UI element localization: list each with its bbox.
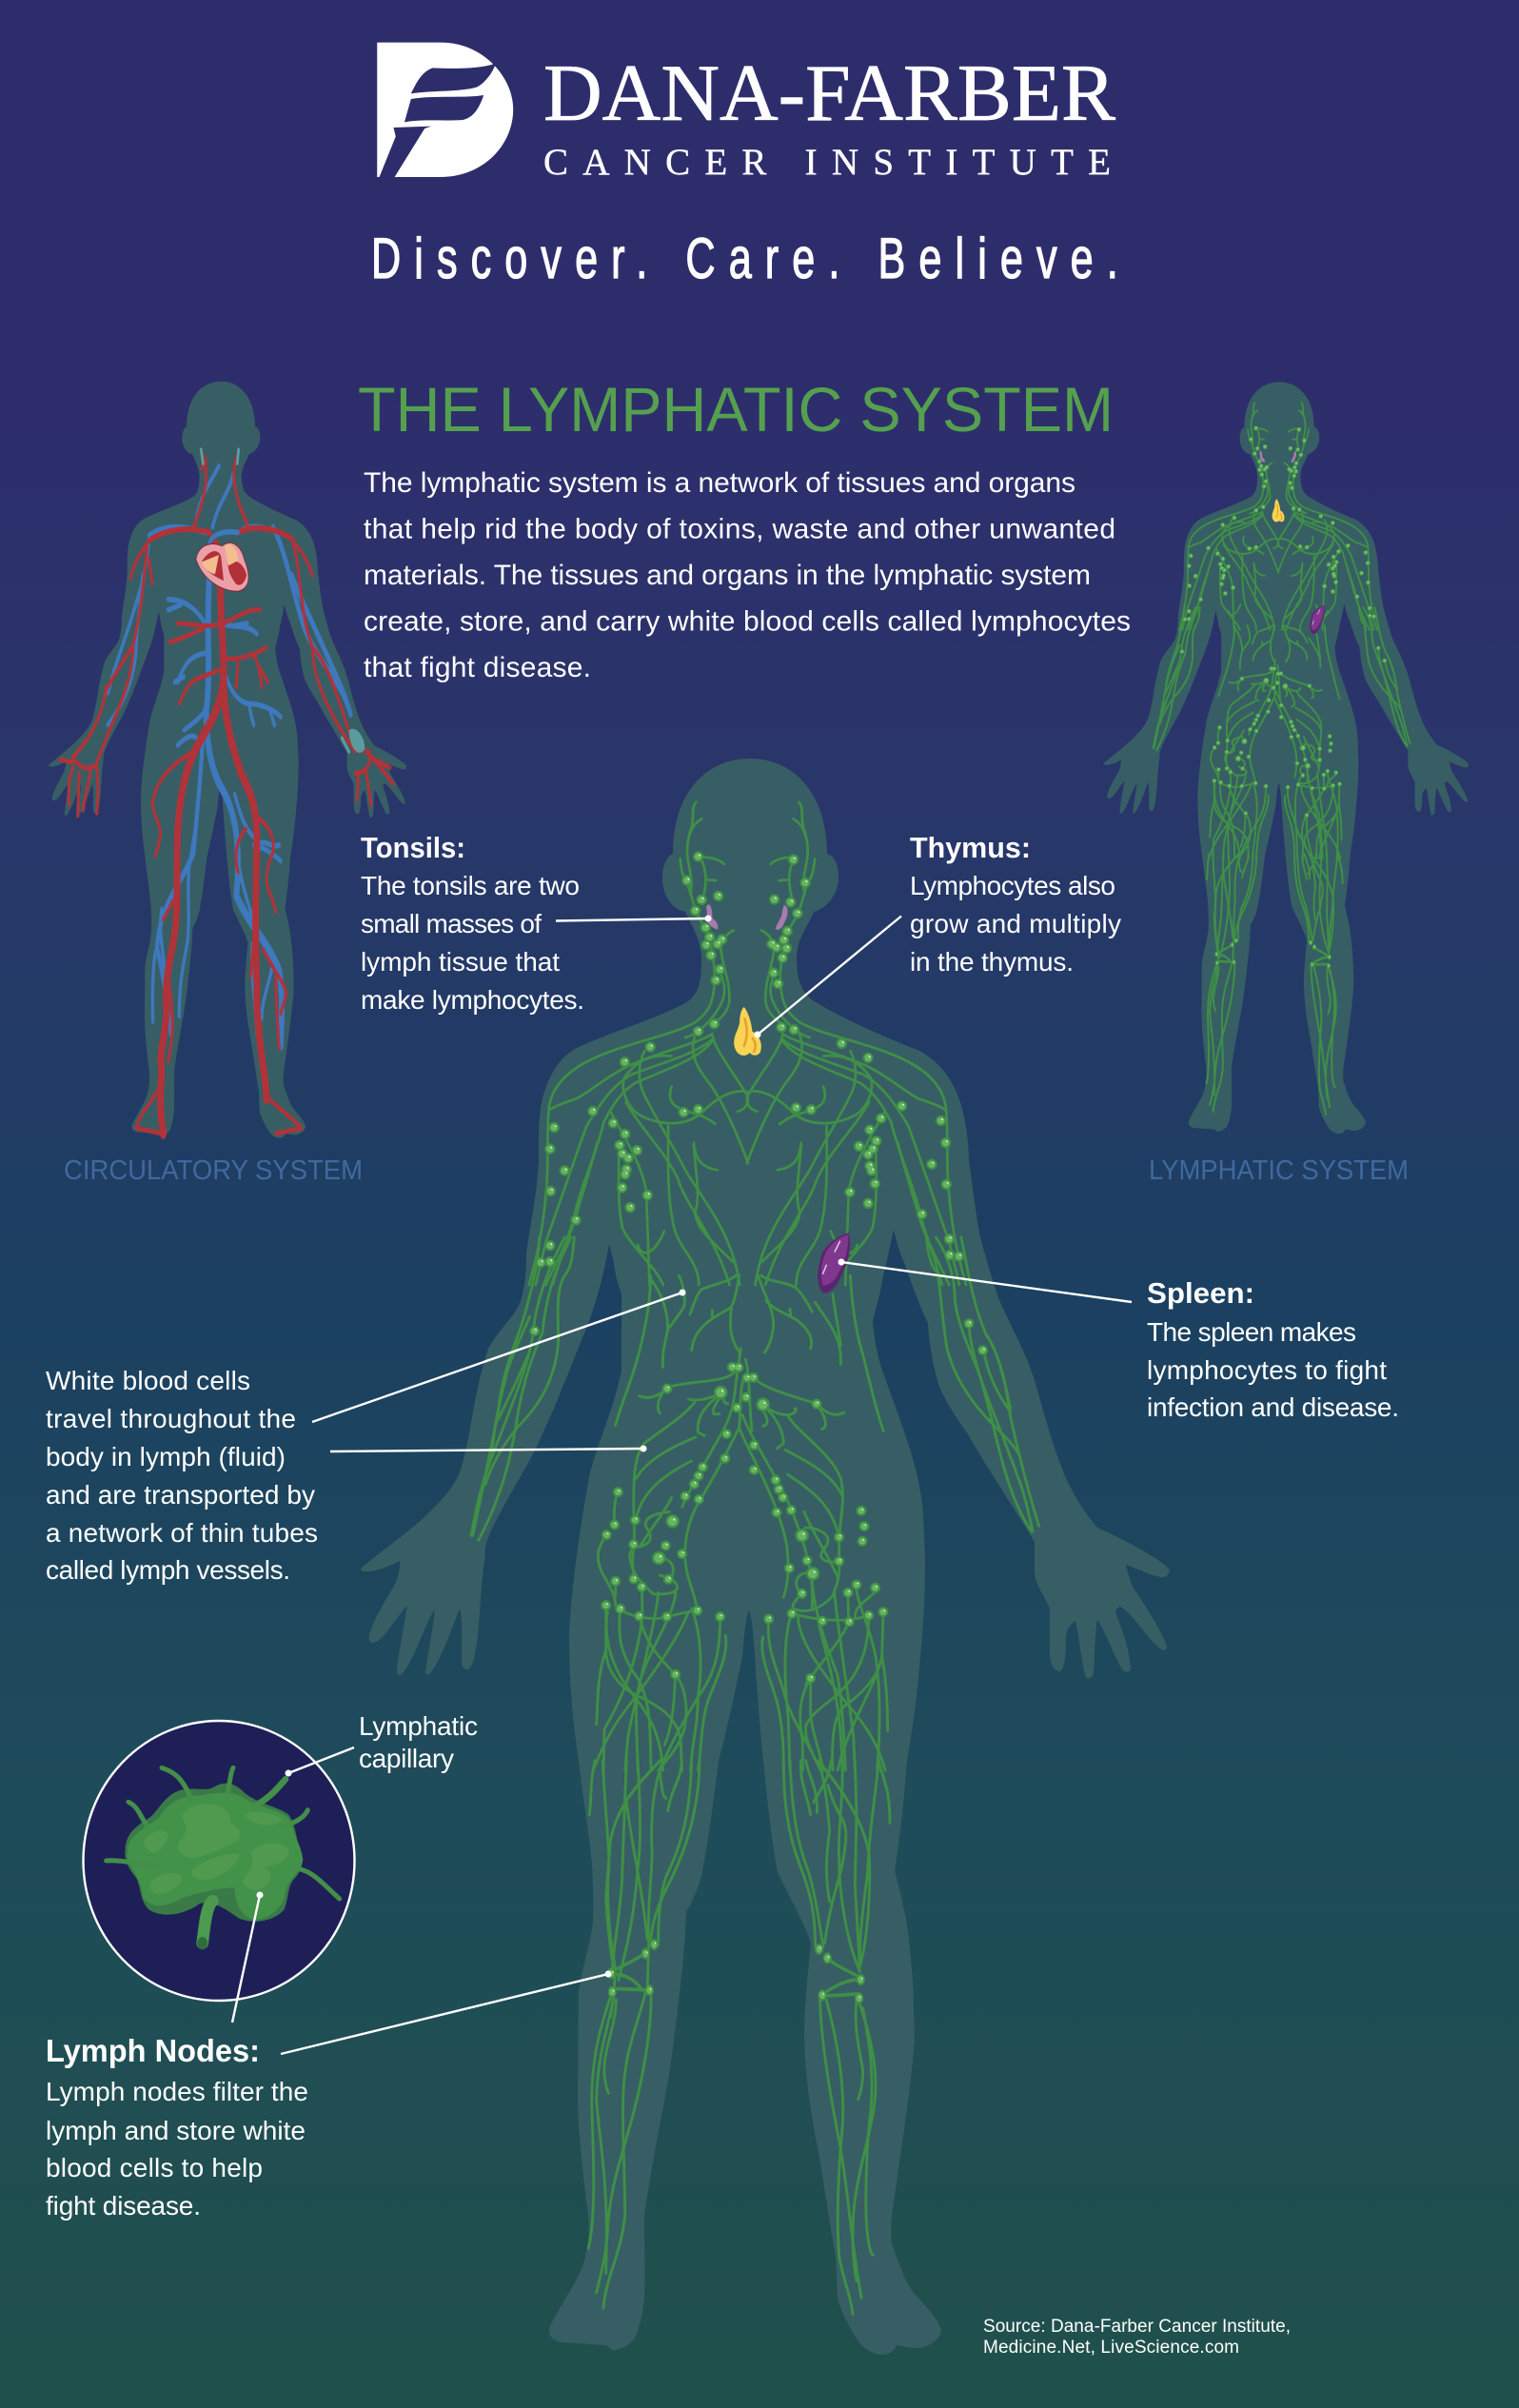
callout: white blood cells: body in lymph (fluid): [46, 1442, 286, 1471]
intro paragraph: materials. The tissues and organs in the lymphatic system: [364, 560, 1091, 591]
lymphatic capillaries: [107, 1767, 340, 1949]
callout: white blood cells: a network of thin tubes: [46, 1518, 318, 1548]
callout: spleen: Spleen:: [1147, 1276, 1254, 1310]
callout: tonsils: [361, 831, 712, 1015]
intro paragraph: create, store, and carry white blood cells called lymphocytes: [364, 605, 1131, 638]
source note: Source: Dana-Farber Cancer Institute,: [983, 2317, 1291, 2337]
logo: Dana-Farber shield: [377, 43, 513, 177]
source note: [983, 2317, 1291, 2358]
callout: lymph nodes: blood cells to help: [46, 2153, 263, 2182]
callout: thymus: grow and multiply: [910, 909, 1121, 938]
circulatory vessels and heart: [60, 450, 393, 1134]
organ: thymus: [734, 1007, 761, 1056]
callout: tonsils: small masses of: [361, 909, 542, 938]
callout: thymus: Thymus:: [910, 831, 1031, 864]
callout: white blood cells: and are transported by: [46, 1480, 315, 1510]
organs: [706, 904, 850, 1293]
callout: white blood cells: travel throughout the: [46, 1404, 296, 1433]
callout: tonsils: The tonsils are two: [361, 871, 580, 900]
callout: lymphatic capillary: [286, 1711, 478, 1776]
lymph vessels and nodes: [471, 802, 1039, 2314]
callout: lymph nodes: [46, 1892, 611, 2220]
callout: white blood cells: White blood cells: [46, 1366, 250, 1395]
callout: lymphatic capillary: capillary: [359, 1744, 454, 1773]
callout: tonsils: lymph tissue that: [361, 947, 560, 977]
callout: white blood cells: [46, 1289, 685, 1585]
icon: heart: [196, 543, 248, 591]
callout: thymus: in the thymus.: [910, 947, 1074, 977]
lymph node blob: [125, 1784, 303, 1922]
source note: Medicine.Net, LiveScience.com: [983, 2338, 1239, 2358]
callout: white blood cells: called lymph vessels.: [46, 1555, 290, 1585]
callout: tonsils: make lymphocytes.: [361, 985, 584, 1015]
label: lymphatic system: LYMPHATIC SYSTEM: [1149, 1155, 1409, 1186]
callout: lymph nodes: Lymph nodes filter the: [46, 2077, 308, 2106]
logo wordmark: Cancer Institute: CANCER INSTITUTE: [543, 142, 1111, 183]
figure: circulatory system: [49, 382, 406, 1138]
intro paragraph: that help rid the body of toxins, waste and other unwanted: [364, 514, 1115, 544]
title: THE LYMPHATIC SYSTEM: [358, 374, 1114, 444]
organ: spleen: [818, 1233, 850, 1293]
callout: spleen: lymphocytes to fight: [1147, 1355, 1387, 1385]
callout: thymus: Lymphocytes also: [910, 871, 1115, 900]
callout: lymph nodes: fight disease.: [46, 2191, 201, 2220]
tagline: Discover. Care. Believe.: [371, 227, 1118, 291]
callout: tonsils: Tonsils:: [361, 831, 465, 864]
lymph node illustration: [84, 1721, 354, 2001]
callout: lymph nodes: lymph and store white: [46, 2116, 306, 2145]
logo wordmark: Dana-Farber: DANA-FARBER: [543, 49, 1115, 138]
intro paragraph: The lymphatic system is a network of tissues and organs: [364, 467, 1075, 499]
organ: tonsils: [706, 904, 788, 930]
callout: spleen: infection and disease.: [1147, 1392, 1399, 1422]
label: circulatory system: CIRCULATORY SYSTEM: [64, 1155, 363, 1186]
callout: thymus: [754, 831, 1121, 1037]
intro paragraph: [364, 467, 1131, 683]
intro paragraph: that fight disease.: [364, 652, 591, 683]
callout: lymph nodes: Lymph Nodes:: [46, 2033, 260, 2068]
figure: small lymphatic system: [1103, 382, 1470, 1134]
callout: lymphatic capillary: Lymphatic: [359, 1711, 478, 1741]
callout: spleen: The spleen makes: [1147, 1317, 1356, 1347]
figure: main body with lymphatic network: [361, 759, 1170, 2355]
callout: spleen: [838, 1258, 1399, 1422]
